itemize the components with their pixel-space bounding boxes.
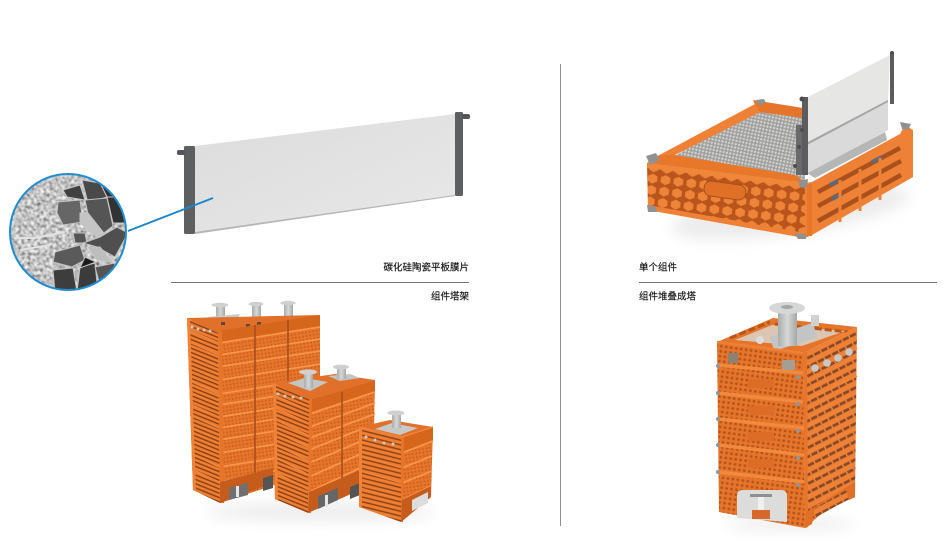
divider: right [639, 282, 937, 284]
label: module towers: 组件塔架 [431, 290, 469, 302]
label: stacked tower: 组件堆叠成塔 [639, 290, 697, 302]
towers group illustration [187, 301, 435, 522]
callout leader line [128, 198, 213, 231]
honeycomb face [717, 342, 805, 528]
divider: left [171, 282, 469, 284]
label: membrane: 碳化硅陶瓷平板膜片 [383, 262, 469, 274]
tower shadow [725, 518, 855, 530]
membrane stack [793, 51, 894, 178]
frame back and mesh [647, 100, 807, 183]
single module illustration [646, 51, 913, 250]
SEM micrograph circle [10, 172, 128, 292]
small tower [359, 410, 433, 522]
module shadow [668, 174, 912, 250]
corner brackets [646, 99, 911, 239]
honeycomb front face [647, 163, 807, 238]
pipe studs [811, 348, 853, 372]
stacked module tower illustration [716, 302, 857, 530]
tall tower [187, 301, 320, 503]
membrane plate illustration [177, 112, 470, 234]
floor shadow [205, 503, 435, 521]
magnified microstructure callout [10, 172, 213, 292]
label: single module: 单个组件 [639, 262, 678, 274]
tower interior and pipe [717, 302, 857, 353]
slatted side face [803, 327, 857, 528]
medium tower [273, 365, 375, 513]
stack clips [716, 364, 800, 487]
slotted side face [805, 125, 913, 238]
divider: vertical centre line [560, 64, 562, 526]
